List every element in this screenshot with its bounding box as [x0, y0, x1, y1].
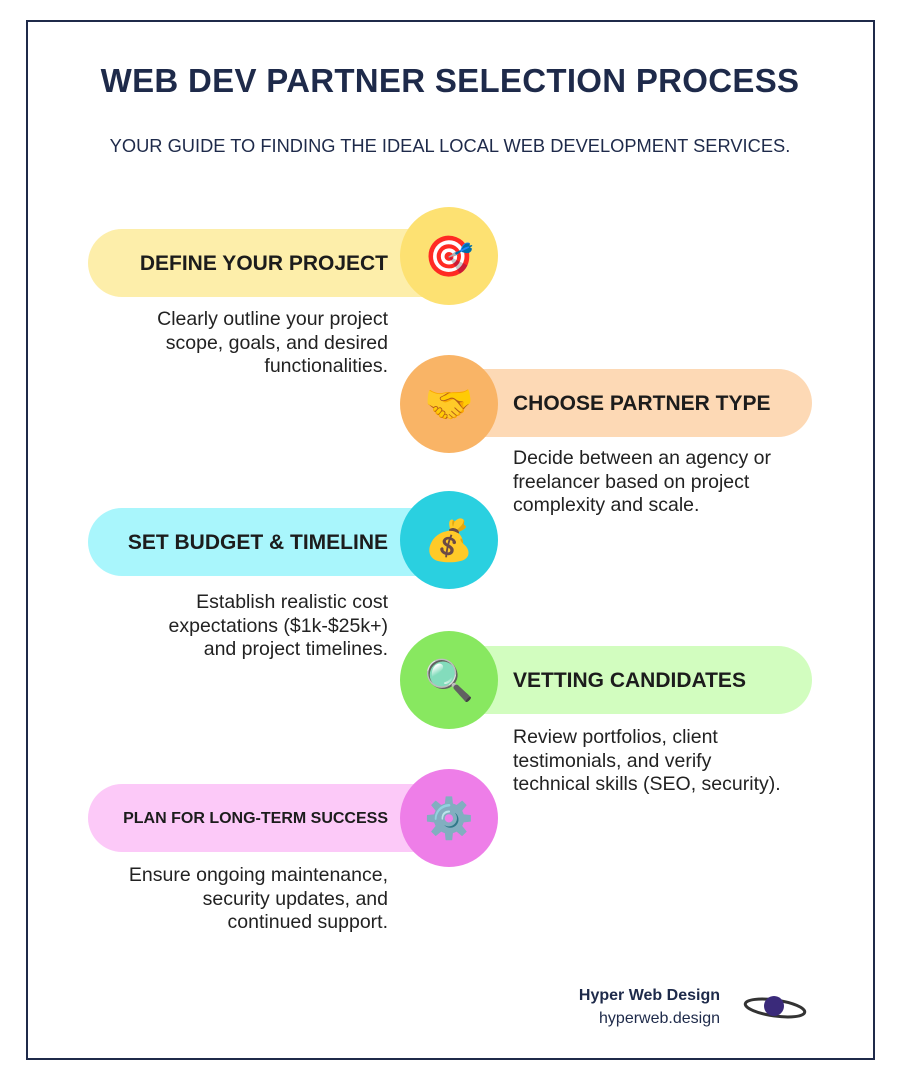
step 4 pill: VETTING CANDIDATES [513, 669, 746, 692]
icon: target: 🎯 [424, 234, 474, 280]
step 2 description: Decide between an agency or [513, 447, 771, 469]
step 5 description: security updates, and [203, 888, 388, 910]
icon: handshake [400, 355, 498, 453]
step 1 description: functionalities. [264, 355, 388, 377]
step 3 description [168, 591, 388, 660]
step 3 description: expectations ($1k-$25k+) [168, 614, 388, 636]
step 1 pill [88, 229, 468, 297]
subtitle: YOUR GUIDE TO FINDING THE IDEAL LOCAL WEB DEVELOPMENT SERVICES. [110, 135, 790, 156]
footer brand: hyperweb.design [599, 1010, 720, 1027]
footer brand [579, 987, 720, 1027]
step 5 description: Ensure ongoing maintenance, [129, 864, 388, 886]
icon: magnifier: 🔍 [424, 658, 474, 704]
step 4 description: technical skills (SEO, security). [513, 773, 781, 795]
title: WEB DEV PARTNER SELECTION PROCESS [101, 62, 799, 99]
step 4 description: Review portfolios, client [513, 726, 718, 748]
step 2 description: freelancer based on project [513, 470, 749, 492]
step 2 pill: CHOOSE PARTNER TYPE [513, 392, 770, 415]
step 5 description [129, 864, 388, 933]
icon: money bag: 💰 [424, 518, 474, 564]
icon: money bag [400, 491, 498, 589]
icon: handshake: 🤝 [424, 382, 474, 428]
step 1 description: Clearly outline your project [157, 308, 388, 330]
step 3 description: and project timelines. [204, 638, 388, 660]
step 5 description: continued support. [228, 911, 388, 933]
step 2 pill [432, 369, 812, 437]
icon: magnifier [400, 631, 498, 729]
step 5 pill: PLAN FOR LONG-TERM SUCCESS [123, 810, 388, 827]
step 3 pill [88, 508, 468, 576]
step 1 description [157, 308, 388, 377]
logo [744, 996, 806, 1018]
step 1 pill: DEFINE YOUR PROJECT [140, 252, 388, 275]
step 3 pill: SET BUDGET & TIMELINE [128, 531, 388, 554]
step 2 description [513, 447, 771, 516]
step 1 description: scope, goals, and desired [166, 332, 388, 354]
step 4 pill [432, 646, 812, 714]
icon: gear: ⚙️ [424, 796, 474, 842]
step 2 description: complexity and scale. [513, 494, 699, 516]
icon: gear [400, 769, 498, 867]
footer brand: Hyper Web Design [579, 987, 720, 1004]
step 4 description: testimonials, and verify [513, 750, 711, 772]
step 5 pill [88, 784, 468, 852]
icon: target [400, 207, 498, 305]
step 4 description [513, 726, 781, 795]
step 3 description: Establish realistic cost [196, 591, 388, 613]
